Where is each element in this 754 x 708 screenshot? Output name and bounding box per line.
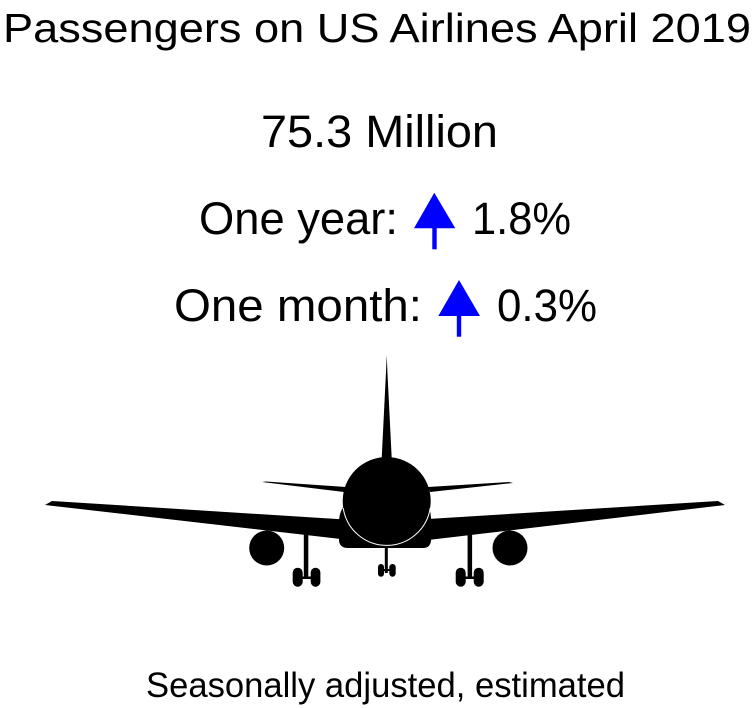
engines xyxy=(249,530,528,566)
lower fuselage xyxy=(339,505,431,548)
one year value: 1.8% xyxy=(472,193,571,244)
icon: one year up arrow xyxy=(414,193,455,249)
fuselage nose xyxy=(343,457,431,545)
total passengers figure: 75.3 Million xyxy=(261,106,498,157)
title: Passengers on US Airlines April 2019 xyxy=(3,5,751,51)
icon: one month up arrow xyxy=(438,280,480,337)
one month value: 0.3% xyxy=(497,280,597,331)
icon: airplane front view xyxy=(45,355,725,587)
one year label: One year: xyxy=(199,193,398,244)
landing gear xyxy=(293,533,484,587)
wings xyxy=(45,501,725,540)
tail fin xyxy=(382,355,392,458)
tailplanes xyxy=(262,482,513,492)
fuselage highlight arc xyxy=(343,508,430,545)
one month label: One month: xyxy=(174,280,422,331)
footnote: Seasonally adjusted, estimated xyxy=(146,666,625,705)
